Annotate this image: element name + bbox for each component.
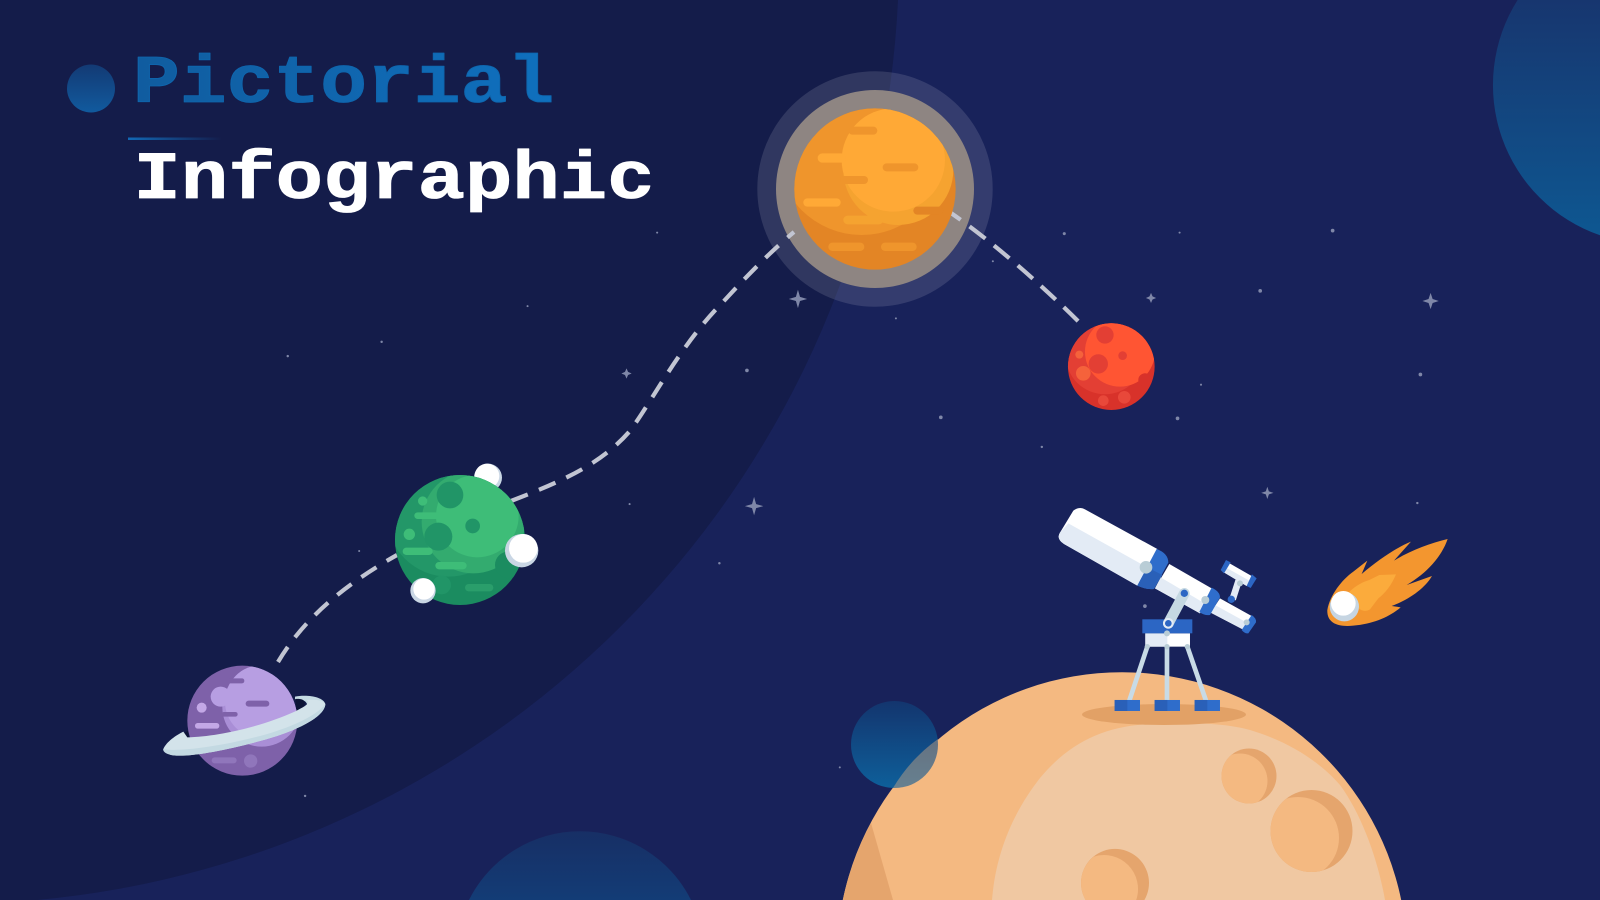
knobs	[1140, 561, 1250, 625]
ring front	[163, 700, 325, 756]
comet head	[1330, 591, 1359, 621]
feet	[1115, 700, 1220, 711]
decorative blue circle over moon	[851, 701, 938, 788]
crater 2	[1270, 790, 1352, 872]
green planet with moons	[395, 464, 538, 605]
comet tail	[1327, 539, 1448, 626]
dark background arc	[0, 0, 898, 900]
telescope	[1059, 508, 1257, 711]
starfield	[287, 229, 1439, 797]
comet	[1327, 539, 1448, 626]
orange planet	[794, 108, 956, 270]
title: Pictorial: Pictorial	[133, 45, 554, 122]
moon top	[474, 464, 502, 492]
crater 1	[1222, 748, 1276, 804]
title dot	[67, 64, 115, 112]
moon bottom	[410, 578, 436, 603]
main tube	[1059, 508, 1157, 586]
red planet	[1066, 316, 1155, 410]
decorative blue circle top right	[1493, 0, 1600, 235]
blue collars	[1137, 549, 1256, 633]
comet inner flame	[1349, 574, 1396, 611]
crater 3	[1081, 849, 1149, 900]
lit area	[992, 723, 1385, 900]
sun ring	[776, 90, 974, 288]
shadow wedge	[843, 823, 893, 900]
moon right	[505, 534, 538, 567]
finder scope	[1221, 560, 1257, 603]
legs	[1129, 647, 1206, 701]
dashed route	[278, 213, 1083, 662]
moon surface	[843, 672, 1401, 900]
sun halo	[757, 71, 993, 307]
arm	[1163, 590, 1188, 629]
third tube	[1211, 598, 1252, 630]
title rule	[128, 138, 222, 140]
title: Infographic: Infographic	[134, 143, 654, 219]
ring back	[181, 696, 325, 740]
mount base	[1142, 619, 1192, 649]
second tube	[1155, 564, 1212, 613]
telescope shadow	[1082, 704, 1246, 725]
purple ringed planet	[163, 665, 325, 776]
decorative blue circle bottom	[469, 831, 691, 900]
